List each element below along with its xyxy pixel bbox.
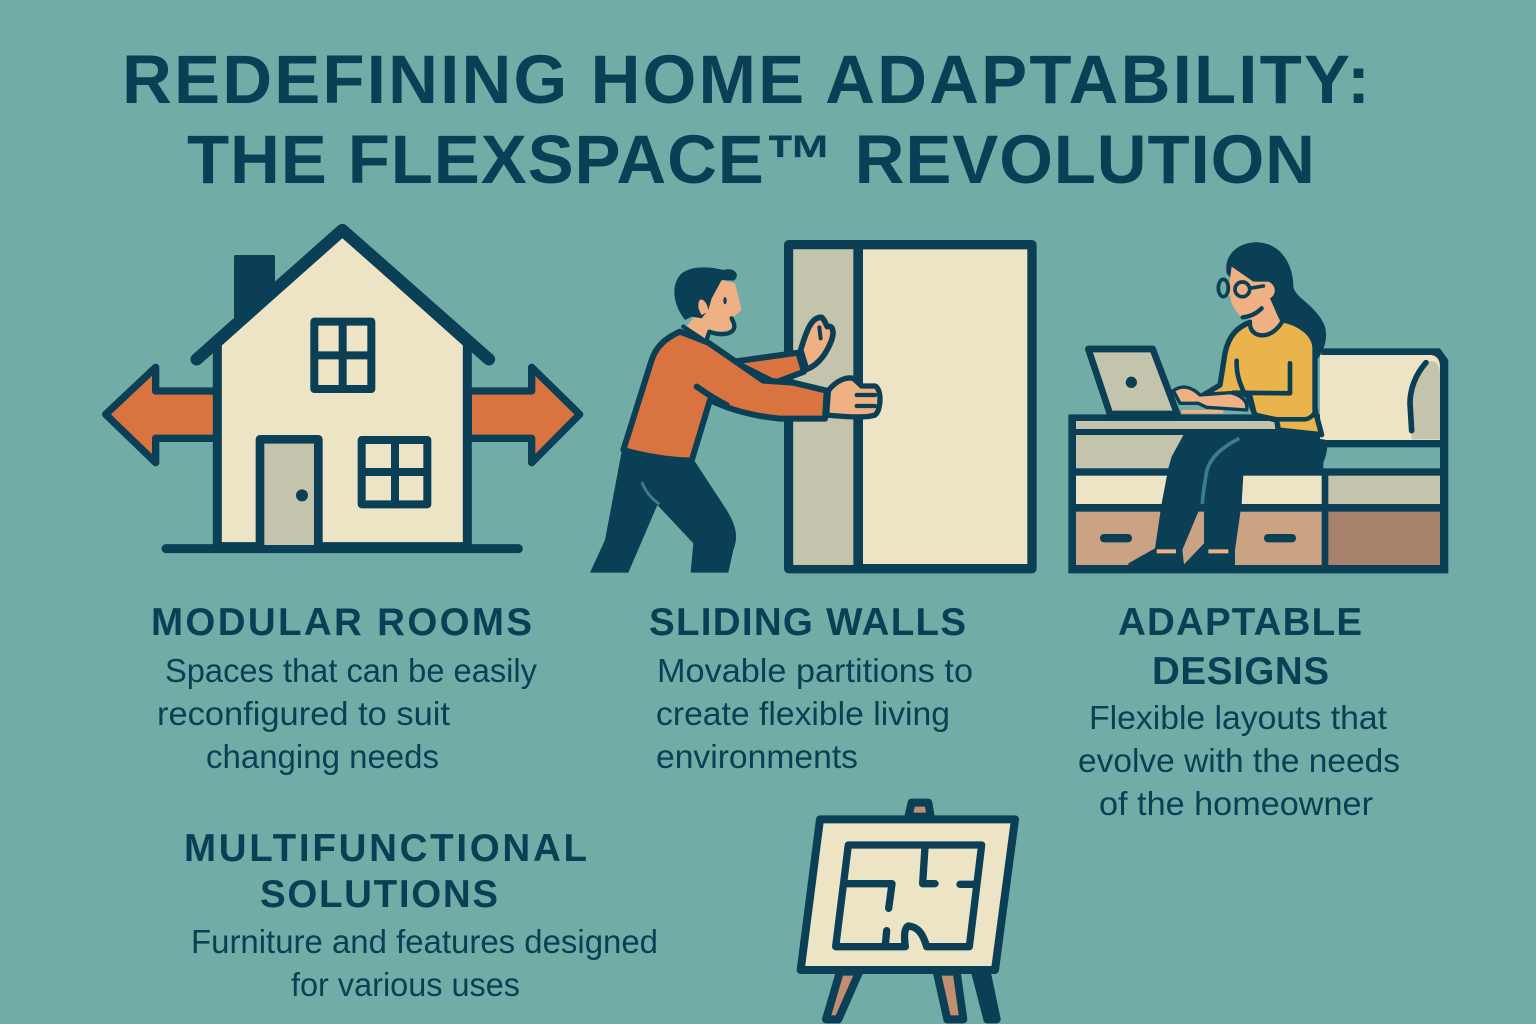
- section: multifunctional solutions: SOLUTIONS: [260, 873, 498, 916]
- section: adaptable designs: DESIGNS: [1152, 650, 1329, 693]
- icon: man pushing sliding wall: [590, 245, 1032, 573]
- section: sliding walls: environments: [656, 738, 858, 775]
- sofa frame: [1068, 348, 1448, 573]
- woman hands: [1173, 387, 1247, 410]
- upper window: [314, 322, 371, 389]
- section: modular rooms: reconfigured to suit: [157, 695, 450, 732]
- section: multifunctional solutions: for various uses: [291, 966, 520, 1003]
- head: [674, 267, 742, 342]
- easel board: [801, 819, 1015, 970]
- ground line: [166, 535, 518, 562]
- yellow sweater: [1203, 320, 1322, 435]
- man trousers: [590, 452, 736, 573]
- sofa cushion: [1320, 355, 1440, 440]
- near hand: [827, 378, 880, 417]
- section: sliding walls: create flexible living: [656, 695, 950, 732]
- sofa base drawers: [1076, 435, 1440, 565]
- section: adaptable designs: of the homeowner: [1099, 785, 1373, 822]
- icon: woman with laptop on sofa desk: [1068, 242, 1448, 573]
- trouser crease: [642, 483, 658, 503]
- section: sliding walls: SLIDING WALLS: [649, 601, 966, 644]
- socks: [1157, 545, 1228, 557]
- trousers: [1128, 432, 1327, 569]
- section: sliding walls: Movable partitions to: [657, 652, 973, 689]
- woman hair: [1226, 242, 1326, 358]
- section: modular rooms: [151, 601, 537, 775]
- icon: house with expansion arrows: [106, 230, 580, 549]
- section: adaptable designs: [1078, 601, 1400, 822]
- icon: floor plan on easel: [801, 803, 1015, 1019]
- title: REDEFINING HOME ADAPTABILITY:: [122, 41, 1370, 118]
- title: [122, 41, 1370, 198]
- glasses: [1218, 279, 1263, 297]
- section: adaptable designs: evolve with the needs: [1078, 742, 1400, 779]
- section: modular rooms: MODULAR ROOMS: [151, 601, 532, 644]
- roof: [197, 230, 489, 359]
- tan gap between legs: [1182, 512, 1204, 564]
- far arm: [733, 353, 804, 383]
- floor plan: [836, 845, 982, 947]
- lower window: [362, 440, 427, 504]
- section: adaptable designs: Flexible layouts that: [1089, 699, 1387, 736]
- smile and collar: [1243, 308, 1283, 335]
- sliding wall frame: [789, 245, 1032, 569]
- far hand: [801, 317, 833, 369]
- section: multifunctional solutions: MULTIFUNCTIONAL: [184, 827, 587, 870]
- shirt and near arm: [623, 332, 827, 461]
- easel legs: [826, 803, 997, 1019]
- section: modular rooms: Spaces that can be easily: [165, 652, 537, 689]
- section: sliding walls: [649, 601, 973, 775]
- icon: left arrow: [106, 367, 217, 463]
- title: THE FLEXSPACE™ REVOLUTION: [187, 121, 1315, 198]
- section: multifunctional solutions: [184, 827, 658, 1003]
- section: multifunctional solutions: Furniture and features designed: [191, 923, 658, 960]
- section: adaptable designs: ADAPTABLE: [1118, 601, 1362, 644]
- trouser crease: [1202, 438, 1239, 504]
- chimney: [234, 255, 275, 322]
- section: modular rooms: changing needs: [206, 738, 439, 775]
- house wall: [217, 232, 467, 547]
- icon: right arrow: [468, 367, 580, 463]
- woman face and neck: [1228, 267, 1282, 335]
- door: [260, 439, 318, 545]
- desk top: [1076, 421, 1275, 429]
- laptop: [1088, 349, 1223, 414]
